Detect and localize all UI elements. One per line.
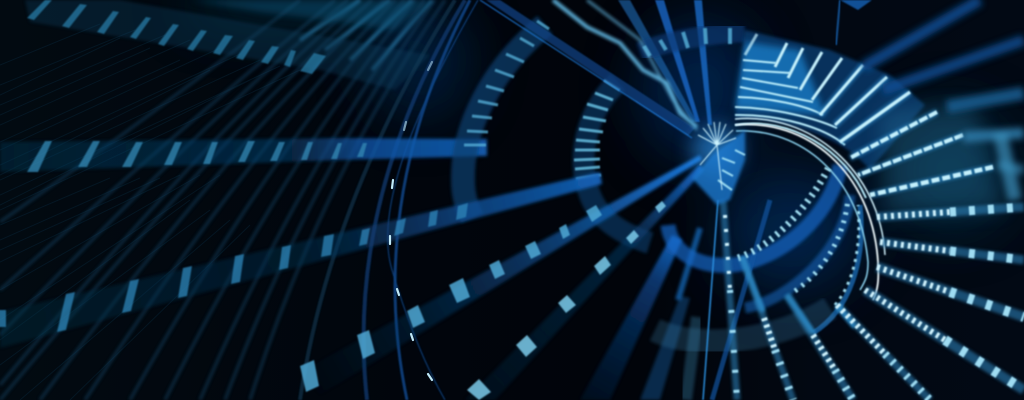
wide ring band: centre left [463,25,545,218]
ring joints [742,257,855,333]
top blue shard [840,0,872,10]
ray: mid diagonal [300,155,702,395]
ray dashes far [730,207,1024,400]
ray: long lower left [0,172,602,348]
burst spokes [698,122,736,190]
glow: blue haze [180,0,1010,290]
large arcs: middle [300,0,478,400]
pale vertical streak [686,317,697,400]
soft streak fan: left [0,0,445,400]
top left band [25,0,430,90]
burst glow [692,126,740,174]
curved ring dashes: right [738,165,859,305]
thin top line [836,0,840,45]
ring dashes: inner [574,80,620,179]
burst ticks [718,150,745,190]
dashes: top centre ring [644,28,730,56]
centre burst [692,122,745,205]
top left teal wash [190,0,430,30]
far right blue streaks [863,0,1024,200]
lower right ring band [655,308,830,341]
bright streak tips: top left fan [300,0,432,70]
ray: horizontal band [0,138,487,172]
fan bright corner [735,42,825,115]
ray: steep blue [678,228,700,300]
dashes: long lower left ray [0,203,468,332]
right ring glow [668,165,840,265]
fine line texture: far left [0,24,300,400]
dashes: top left band [27,0,326,74]
ray glow bands [723,200,1024,400]
burst body [692,130,745,205]
ray dashes near [725,212,950,370]
concentric arcs [735,60,866,198]
right ladder rays [723,200,1024,400]
fan panel fill [735,30,925,170]
branching streaks: top centre [553,0,697,130]
ray: lower diagonal [465,164,704,400]
bright top right fan panel [735,30,1005,300]
small ring dots: middle arc [390,62,432,380]
fan tick glow [820,65,993,195]
ring band: top centre [640,32,745,52]
ring dashes: centre left [464,21,549,145]
fan radial ticks [745,34,993,195]
ray: top to centre [480,0,712,138]
ring three glow [813,205,861,333]
inner ring band: centre [584,82,650,243]
dashes: lower diagonal ray [467,201,666,400]
thin blue verticals [703,200,770,400]
main bright arcs [735,118,885,300]
ring two glow [745,195,850,308]
dashes: mid diagonal ray [300,205,602,392]
ray: steep pale lower [640,296,690,400]
pale teal wash [880,105,1005,215]
ray: steep dark [580,235,682,400]
dashes: horizontal band [27,141,367,172]
